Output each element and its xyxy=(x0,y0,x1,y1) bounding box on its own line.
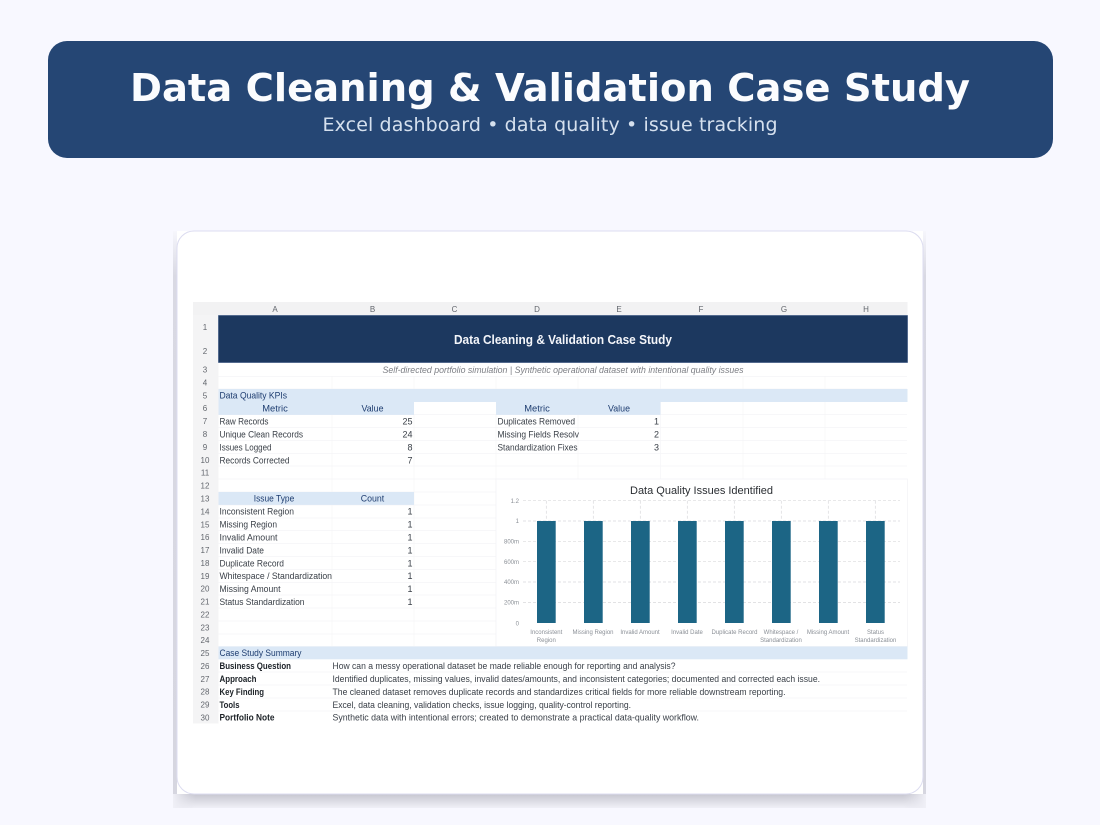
section band: summary: Case Study Summary xyxy=(220,648,302,658)
bar chart: Invalid Date xyxy=(671,630,704,636)
issue table: Duplicate Record xyxy=(220,558,284,568)
row numbers: 21 xyxy=(201,598,210,606)
row numbers: 29 xyxy=(201,700,210,710)
issue table: Missing Amount xyxy=(220,584,281,594)
row numbers: 19 xyxy=(201,572,210,581)
summary rows: Identified duplicates, missing values, invalid dates/amounts, and inconsistent categories; documented and corrected each issue. xyxy=(332,674,820,684)
row numbers: 13 xyxy=(201,494,210,504)
issue table: 1 xyxy=(407,546,412,556)
KPI table right: Value xyxy=(608,404,630,414)
issue table: 1 xyxy=(407,520,412,530)
issue table: Missing Region xyxy=(220,520,277,530)
row numbers: 1 xyxy=(203,323,208,332)
row numbers: 22 xyxy=(201,610,210,620)
issue table: Issue Type xyxy=(254,494,294,504)
row numbers: 20 xyxy=(201,584,210,594)
column headers: A xyxy=(272,305,278,314)
KPI table right: Missing Fields Resolv xyxy=(498,430,579,440)
KPI table right: Metric xyxy=(524,404,550,414)
row numbers: 27 xyxy=(201,675,210,684)
issue table: 1 xyxy=(407,532,412,542)
bar chart xyxy=(496,479,908,646)
KPI table right: 3 xyxy=(654,442,659,452)
KPI table left: 8 xyxy=(407,442,412,452)
KPI table right: 2 xyxy=(654,430,659,440)
card shadow xyxy=(173,231,926,808)
KPI table right: 1 xyxy=(654,416,659,426)
row numbers: 24 xyxy=(201,636,210,645)
issue table: 1 xyxy=(407,506,412,516)
bar chart: 1 xyxy=(516,519,520,525)
issue table: 1 xyxy=(407,597,412,607)
summary rows: Excel, data cleaning, validation checks, issue logging, quality-control reporting. xyxy=(332,700,631,710)
section band: KPIs: Data Quality KPIs xyxy=(220,390,287,400)
row numbers: 8 xyxy=(203,430,208,439)
issue table: 1 xyxy=(407,558,412,568)
KPI table right: Standardization Fixes xyxy=(498,442,578,452)
column headers xyxy=(193,302,908,315)
bar chart: Standardization xyxy=(760,638,802,644)
column headers: D xyxy=(534,305,540,314)
issue table: Invalid Amount xyxy=(220,532,278,542)
column headers: F xyxy=(699,305,704,314)
bar chart: 0 xyxy=(516,622,520,628)
summary rows: Portfolio Note xyxy=(220,712,274,722)
row numbers: 17 xyxy=(201,546,210,555)
row numbers: 5 xyxy=(203,392,208,400)
column headers: H xyxy=(863,305,869,314)
bar chart: 400m xyxy=(504,580,519,586)
summary rows: How can a messy operational dataset be made reliable enough for reporting and analysis? xyxy=(332,661,676,671)
KPI table left: Records Corrected xyxy=(220,456,290,466)
sheet title band: Data Cleaning & Validation Case Study xyxy=(454,333,672,347)
KPI table left: Issues Logged xyxy=(220,442,272,452)
bar chart: Inconsistent xyxy=(530,630,563,636)
KPI table left: Unique Clean Records xyxy=(220,430,303,440)
issue table: Whitespace / Standardization xyxy=(220,571,332,581)
row numbers xyxy=(193,315,218,724)
sheet subtitle: Self-directed portfolio simulation | Synthetic operational dataset with intentional quality issues xyxy=(382,365,744,375)
bar chart: Whitespace / xyxy=(764,630,799,636)
chart title: Data Quality Issues Identified xyxy=(630,485,773,497)
subtitle: Excel dashboard • data quality • issue tracking xyxy=(322,114,778,136)
row numbers: 16 xyxy=(201,533,210,542)
row numbers: 23 xyxy=(201,624,210,632)
row numbers: 9 xyxy=(203,443,208,452)
issue table: Invalid Date xyxy=(220,546,264,556)
section band: KPIs xyxy=(218,389,908,402)
issue table: 1 xyxy=(407,584,412,594)
KPI table left: 24 xyxy=(402,430,412,440)
header banner xyxy=(48,41,1053,158)
row numbers: 11 xyxy=(201,468,210,478)
title: Data Cleaning & Validation Case Study xyxy=(130,66,970,111)
summary rows: Business Question xyxy=(220,661,291,671)
sheet title band xyxy=(218,316,908,362)
section band: summary xyxy=(218,646,908,659)
column headers: B xyxy=(370,305,375,314)
row numbers: 4 xyxy=(203,378,208,388)
issue table: 1 xyxy=(407,571,412,581)
row numbers: 6 xyxy=(203,404,208,413)
KPI table right: Duplicates Removed xyxy=(498,416,575,426)
summary rows xyxy=(220,661,820,722)
row numbers: 30 xyxy=(201,714,210,722)
KPI table left: Raw Records xyxy=(220,416,269,426)
row numbers: 12 xyxy=(201,482,210,490)
summary rows: Tools xyxy=(220,700,240,710)
bar chart: Missing Amount xyxy=(807,630,850,636)
bar chart: Missing Region xyxy=(572,630,614,636)
row numbers: 3 xyxy=(203,366,208,374)
column headers: C xyxy=(452,305,458,314)
KPI table left: 7 xyxy=(407,456,412,466)
column headers: E xyxy=(616,305,622,314)
bar chart: 200m xyxy=(504,600,519,606)
row numbers: 18 xyxy=(201,559,210,568)
column headers: G xyxy=(781,305,787,314)
summary rows: The cleaned dataset removes duplicate records and standardizes critical fields for more reliable downstream reporting. xyxy=(332,687,786,697)
bar chart: 800m xyxy=(504,540,519,546)
bar chart: Standardization xyxy=(855,638,896,644)
card xyxy=(177,231,923,794)
summary rows: Key Finding xyxy=(220,687,264,697)
summary rows: Synthetic data with intentional errors; created to demonstrate a practical data-quality workflow. xyxy=(332,712,699,722)
row numbers: 14 xyxy=(201,508,210,516)
issue table: Status Standardization xyxy=(220,597,304,607)
bar chart: Invalid Amount xyxy=(620,630,660,636)
KPI table left xyxy=(218,402,414,466)
spreadsheet xyxy=(193,302,908,724)
row numbers: 10 xyxy=(201,456,210,465)
row numbers: 25 xyxy=(201,649,210,658)
summary rows: Approach xyxy=(220,674,256,684)
issue table: Inconsistent Region xyxy=(220,506,294,516)
KPI table right xyxy=(496,402,660,452)
bar chart: Duplicate Record xyxy=(711,630,758,636)
row numbers: 28 xyxy=(201,688,210,696)
row numbers: 2 xyxy=(203,347,208,356)
KPI table left: Value xyxy=(362,404,384,414)
row numbers: 7 xyxy=(203,417,208,426)
issue table: Count xyxy=(361,494,385,504)
row numbers: 26 xyxy=(201,662,210,671)
KPI table left: Metric xyxy=(262,404,288,414)
bar chart: 1.2 xyxy=(511,499,520,505)
bar chart: Region xyxy=(537,638,556,644)
issue table xyxy=(218,492,414,607)
bar chart: Status xyxy=(867,630,884,636)
KPI table left: 25 xyxy=(402,416,412,426)
row numbers: 15 xyxy=(201,520,210,530)
bar chart: 600m xyxy=(504,560,519,566)
